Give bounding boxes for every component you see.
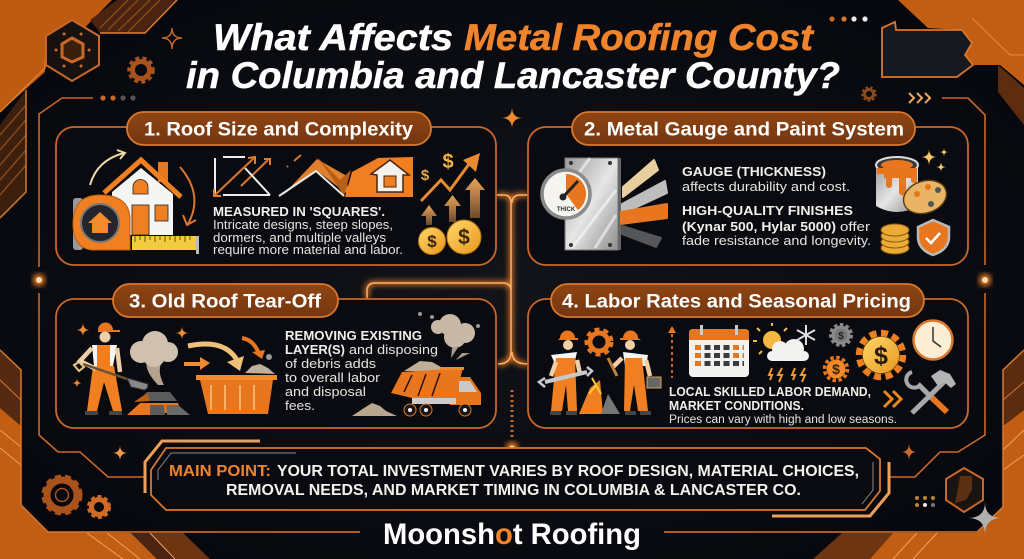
text: removing existing layers: LAYER(S) <box>285 342 345 357</box>
icon: rising cost with coins: $ <box>421 167 430 184</box>
text: high-quality finishes: fade resistance and longevity. <box>682 234 871 248</box>
main point text: YOUR TOTAL INVESTMENT VARIES BY ROOF DESIGN, MATERIAL CHOICES, <box>277 463 859 480</box>
text: measured in squares: require more material and labor. <box>213 243 403 257</box>
icon: material pile <box>579 378 620 414</box>
corner: bottom-left <box>0 350 210 559</box>
icon: rising cost with coins <box>418 151 485 254</box>
icon: brick pile <box>127 392 190 415</box>
heading pill 3: 3. Old Roof Tear-Off <box>129 290 322 312</box>
glowing center connectors <box>367 195 528 440</box>
text: removing existing layers: REMOVING EXISTING <box>285 328 422 343</box>
icon: shield <box>918 220 949 255</box>
icon: roof shapes <box>279 155 413 197</box>
icon: worker with shovel <box>74 323 148 415</box>
text: measured in squares: Intricate designs, steep slopes, <box>213 218 393 232</box>
icon: arrows to dumpster <box>184 338 272 371</box>
icon: gear top-left <box>129 58 153 82</box>
lower-right sparkle <box>901 443 917 461</box>
icon: dollar gears: $ <box>874 342 888 370</box>
icon: hexagon badge <box>46 20 99 81</box>
panel: roof size and complexity <box>56 112 496 265</box>
icon: dot grid <box>915 496 935 507</box>
text: high-quality finishes: (Kynar 500, Hylar 5000) <box>682 219 836 234</box>
title: Metal Roofing Cost <box>464 17 815 58</box>
panel: old roof tear-off <box>56 284 496 428</box>
icon: dotted up arrow <box>668 326 676 378</box>
text: gauge <box>682 164 850 194</box>
icon: gray sparkle <box>968 502 1002 535</box>
corner: top-right <box>898 0 1024 125</box>
main point text: REMOVAL NEEDS, AND MARKET TIMING IN COLUMBIA & LANCASTER CO. <box>226 482 801 499</box>
text: removing existing layers: to overall labor <box>285 371 380 385</box>
main point text <box>169 463 859 499</box>
corner: top-left <box>0 0 177 218</box>
icon: worker left <box>539 331 592 415</box>
icon: chevrons <box>884 391 901 407</box>
icon: smoke cloud <box>418 312 480 360</box>
icon: debris heap <box>352 403 397 416</box>
panel: labor rates and seasonal pricing <box>528 284 968 428</box>
text: high-quality finishes: HIGH-QUALITY FINISHES <box>682 203 853 218</box>
icon: rising cost with coins: $ <box>458 226 470 249</box>
icon: house with tape measure <box>73 150 199 254</box>
heading pill 1 <box>127 112 431 145</box>
icon: calendar <box>689 325 749 377</box>
icon: Pennsylvania map <box>882 22 973 77</box>
glow nodes <box>33 274 991 454</box>
text: measured in squares: MEASURED IN 'SQUARES'. <box>213 204 385 219</box>
heading pill 2 <box>572 112 915 145</box>
dots left <box>100 95 136 101</box>
text: measured in squares: dormers, and multiple valleys <box>213 231 386 245</box>
icon: rising cost with coins: $ <box>442 151 454 173</box>
icon: metal plate and gauge <box>542 158 621 250</box>
corner: bottom-right <box>813 350 1024 559</box>
icon: measurement diagram <box>214 157 270 196</box>
main point text: MAIN POINT: <box>169 463 271 480</box>
text: local skilled labor: Prices can vary with high and low seasons. <box>669 414 897 426</box>
panel: metal gauge and paint system <box>528 112 968 265</box>
icon: dump truck <box>391 361 481 416</box>
icon: dollar gears: $ <box>832 361 840 377</box>
brand: Moonshot Roofing: Moonshot Roofing <box>383 518 641 551</box>
text: high-quality finishes <box>682 203 871 248</box>
icon: dust cloud <box>72 322 189 388</box>
icon: chevrons top-right <box>909 93 930 103</box>
icon: gears lower-left <box>44 476 110 518</box>
heading pill 4: 4. Labor Rates and Seasonal Pricing <box>562 290 911 312</box>
text: local skilled labor <box>669 384 897 426</box>
icon: coin stack <box>881 224 909 254</box>
icon: rising cost with coins: $ <box>427 232 437 251</box>
icon: hexagon lower-right <box>946 468 983 512</box>
icon: dollar gears: $ <box>838 331 844 342</box>
text: high-quality finishes: offer <box>840 220 870 234</box>
heading pill 3 <box>113 284 338 317</box>
icon: clock <box>914 320 952 360</box>
title <box>186 17 840 96</box>
icon: paint can and palette <box>876 148 951 219</box>
text: removing existing layers: and disposing <box>349 343 438 357</box>
text: removing existing layers: fees. <box>285 399 315 413</box>
heading pill 1: 1. Roof Size and Complexity <box>144 118 413 140</box>
icon: weather <box>753 323 815 382</box>
text: gauge: GAUGE (THICKNESS) <box>682 164 826 179</box>
icon: gear between workers <box>586 330 612 354</box>
text: gauge: affects durability and cost. <box>682 180 850 194</box>
icon: wrench and hammer <box>906 370 956 413</box>
text: removing existing layers: and disposal <box>285 385 366 399</box>
icon: dumpster <box>196 364 277 414</box>
text: removing existing layers <box>285 328 438 413</box>
icon: star center <box>501 107 523 129</box>
heading pill 4 <box>551 284 924 317</box>
icon: dollar gears <box>824 324 903 380</box>
icon: metal plate and gauge: THICK <box>557 207 576 213</box>
text: local skilled labor: LOCAL SKILLED LABOR DEMAND, <box>669 384 871 399</box>
icon: small gear top-right <box>862 88 876 100</box>
icon: sparkle top-left <box>162 28 182 49</box>
text: measured in squares <box>213 204 403 257</box>
dots right <box>829 16 868 22</box>
icon: worker right <box>608 331 661 415</box>
title: What Affects <box>213 17 453 58</box>
callout: main point <box>145 441 889 516</box>
text: local skilled labor: MARKET CONDITIONS. <box>669 398 804 413</box>
icon: finish swatches <box>621 160 667 247</box>
text: removing existing layers: of debris adds <box>285 357 376 371</box>
title: in Columbia and Lancaster County? <box>186 55 840 96</box>
lower-left sparkle <box>112 445 128 461</box>
heading pill 2: 2. Metal Gauge and Paint System <box>584 118 904 140</box>
